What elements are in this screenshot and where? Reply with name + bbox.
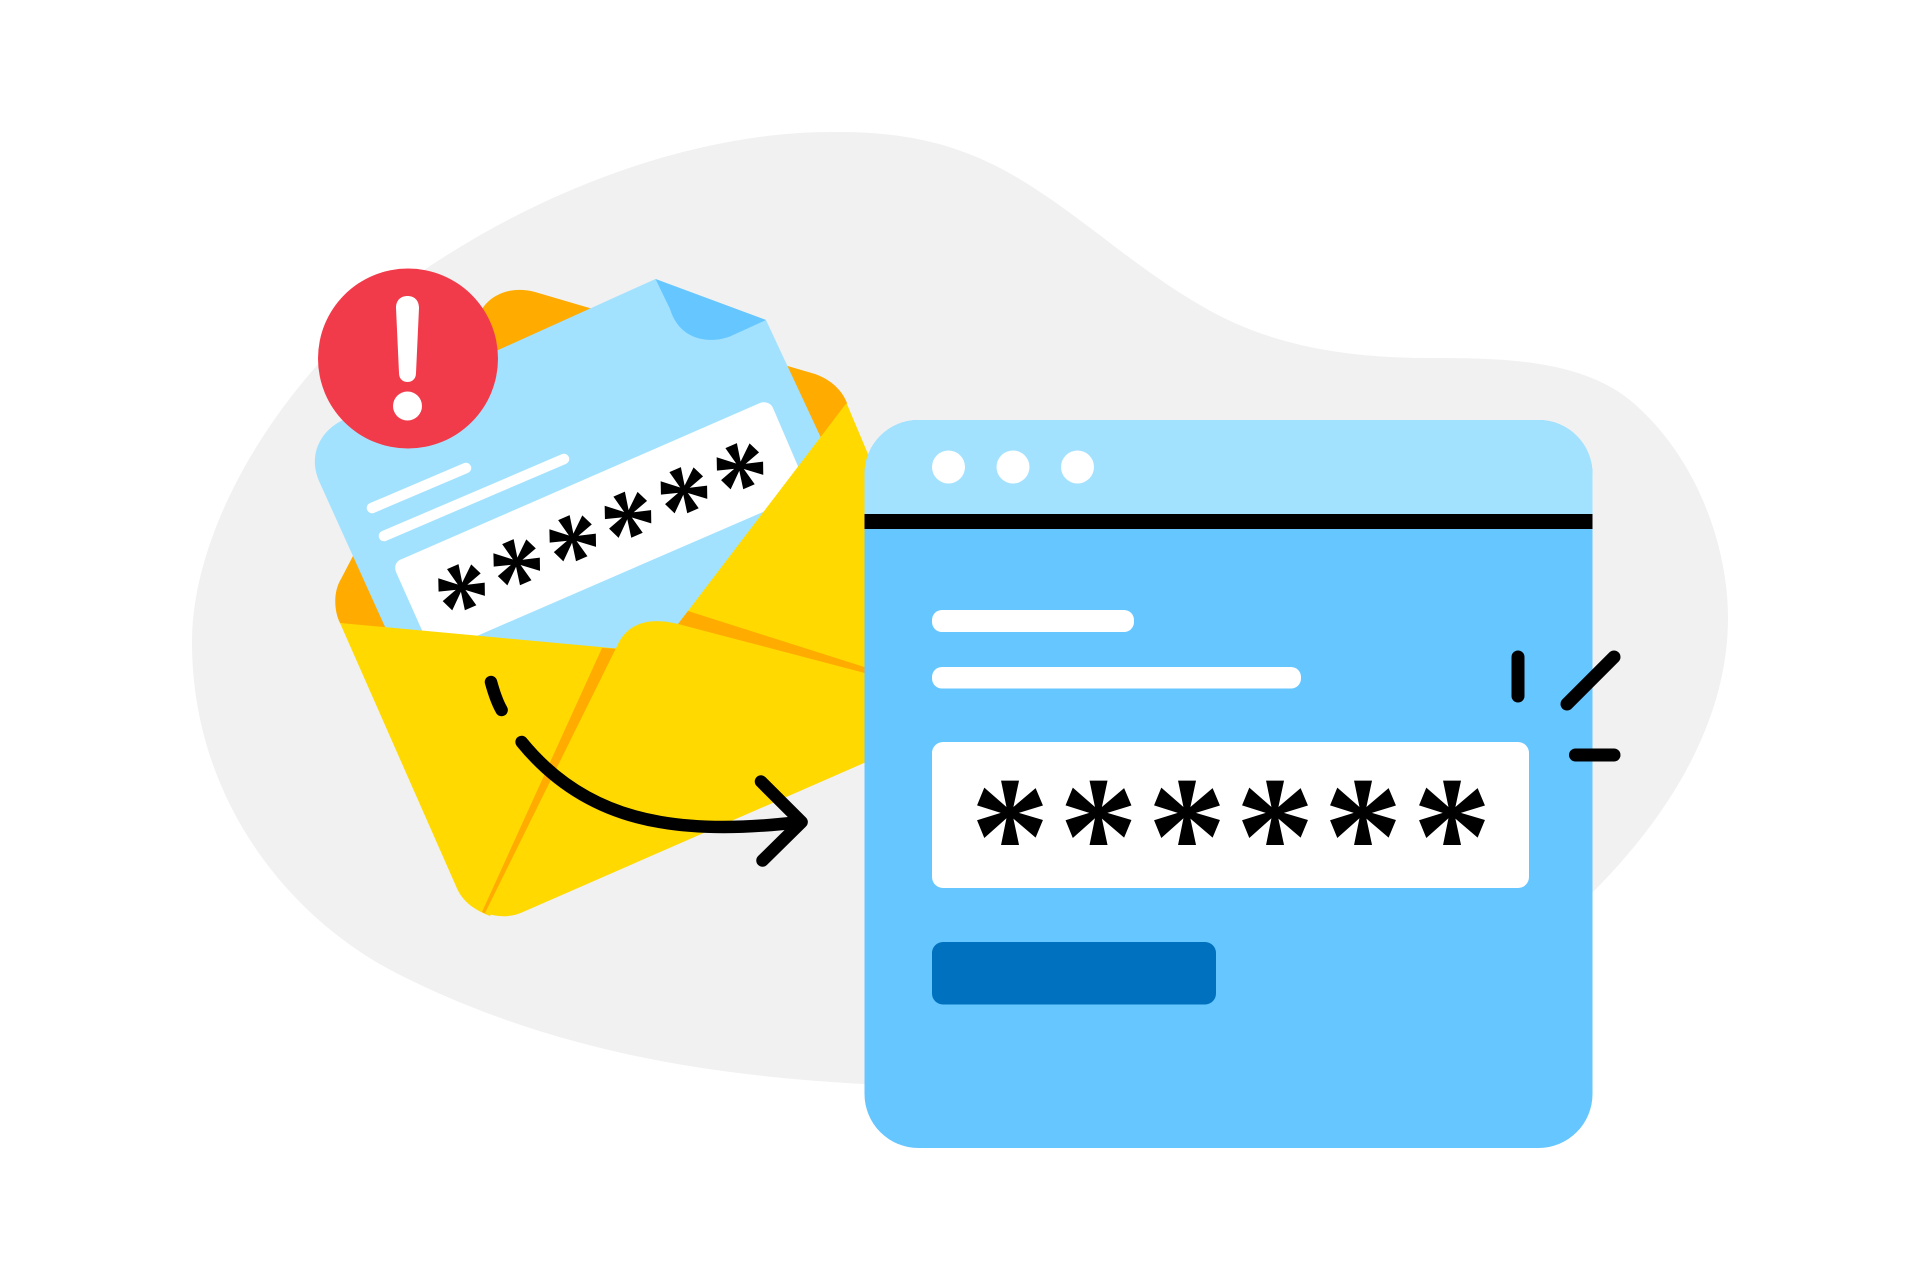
paper password asterisks: * (472, 505, 575, 648)
password asterisks (971, 741, 1491, 931)
spark vertical (1512, 657, 1524, 696)
password asterisks: * (1148, 741, 1226, 931)
window control dots (932, 450, 1094, 484)
envelope front left flap (340, 623, 622, 916)
window body (864, 420, 1592, 1148)
alert badge (318, 268, 498, 448)
password asterisks: * (1324, 741, 1402, 931)
browser window (864, 420, 1592, 1148)
paper text line 1 (372, 468, 466, 508)
password asterisks: * (1059, 741, 1138, 931)
window title bar (864, 420, 1592, 516)
envelope fold shadow bottom (482, 648, 622, 914)
password input field (932, 742, 1529, 888)
envelope front right flap (485, 621, 880, 916)
paper password asterisks: * (583, 458, 686, 601)
title bar divider (864, 514, 1592, 529)
paper password asterisks: * (528, 481, 631, 624)
spark lines (1518, 657, 1614, 755)
envelope back (335, 290, 847, 700)
label line 2 (932, 667, 1301, 688)
envelope fold shadow right (678, 611, 880, 682)
password asterisks: * (1413, 741, 1491, 931)
password asterisks: * (971, 741, 1049, 931)
exclamation bar (396, 296, 419, 382)
spark diagonal (1567, 657, 1614, 704)
paper password field (395, 402, 809, 655)
arrow head (761, 782, 802, 860)
paper password asterisks: * (417, 530, 520, 673)
paper folded corner (656, 279, 766, 340)
paper password asterisks: * (695, 409, 798, 552)
background blob (192, 132, 1728, 1100)
paper sheet (315, 279, 850, 720)
paper text line 2 (384, 459, 564, 536)
paper password asterisks: * (639, 433, 742, 576)
exclamation dot (393, 392, 422, 420)
email paper (315, 279, 850, 720)
arrow dash (491, 682, 502, 710)
envelope inner right flap (678, 403, 880, 700)
envelope (315, 279, 880, 916)
paper password asterisks (417, 409, 798, 673)
spark horizontal (1576, 748, 1614, 762)
red circle (318, 268, 498, 448)
label line 1 (932, 610, 1134, 632)
arrow curve (522, 742, 800, 827)
password asterisks: * (1236, 741, 1314, 931)
arrow from email to login (491, 682, 802, 860)
submit button (932, 942, 1216, 1004)
